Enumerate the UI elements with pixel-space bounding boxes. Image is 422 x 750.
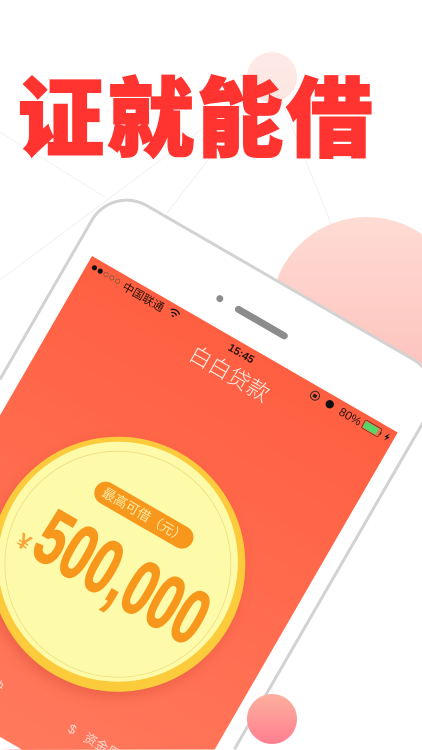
status bar: carrier: 中国联通 xyxy=(120,280,167,315)
currency symbol: ¥ xyxy=(12,528,36,556)
screen title: 白白贷款 xyxy=(185,341,274,407)
phone body xyxy=(0,186,422,750)
status bar: signal dots xyxy=(91,264,121,285)
status bar: rotation lock icon xyxy=(309,390,321,402)
feature label: funds: $ xyxy=(66,721,80,738)
status bar: wifi icon xyxy=(168,308,180,319)
title: 证就能借 xyxy=(18,49,376,174)
status bar: time: 15:45 xyxy=(226,342,256,366)
white bottom panel xyxy=(0,737,22,750)
speaker xyxy=(234,305,289,341)
status bar: battery xyxy=(361,420,383,438)
amount: 500,000 xyxy=(20,493,225,662)
coin xyxy=(0,390,292,743)
camera xyxy=(215,294,225,303)
circle: large pink behind phone xyxy=(271,217,422,409)
circle: bottom coral xyxy=(247,694,297,744)
status bar: alarm icon xyxy=(324,398,335,410)
circle: top pink xyxy=(247,52,297,102)
screen xyxy=(0,256,398,750)
phone xyxy=(0,186,422,750)
feature label: funds xyxy=(68,724,120,750)
pill label xyxy=(90,477,198,553)
pill label: 最高可借（元） xyxy=(99,484,189,545)
status bar: battery percent: 80% xyxy=(336,405,364,429)
status bar: charging bolt xyxy=(382,432,392,442)
